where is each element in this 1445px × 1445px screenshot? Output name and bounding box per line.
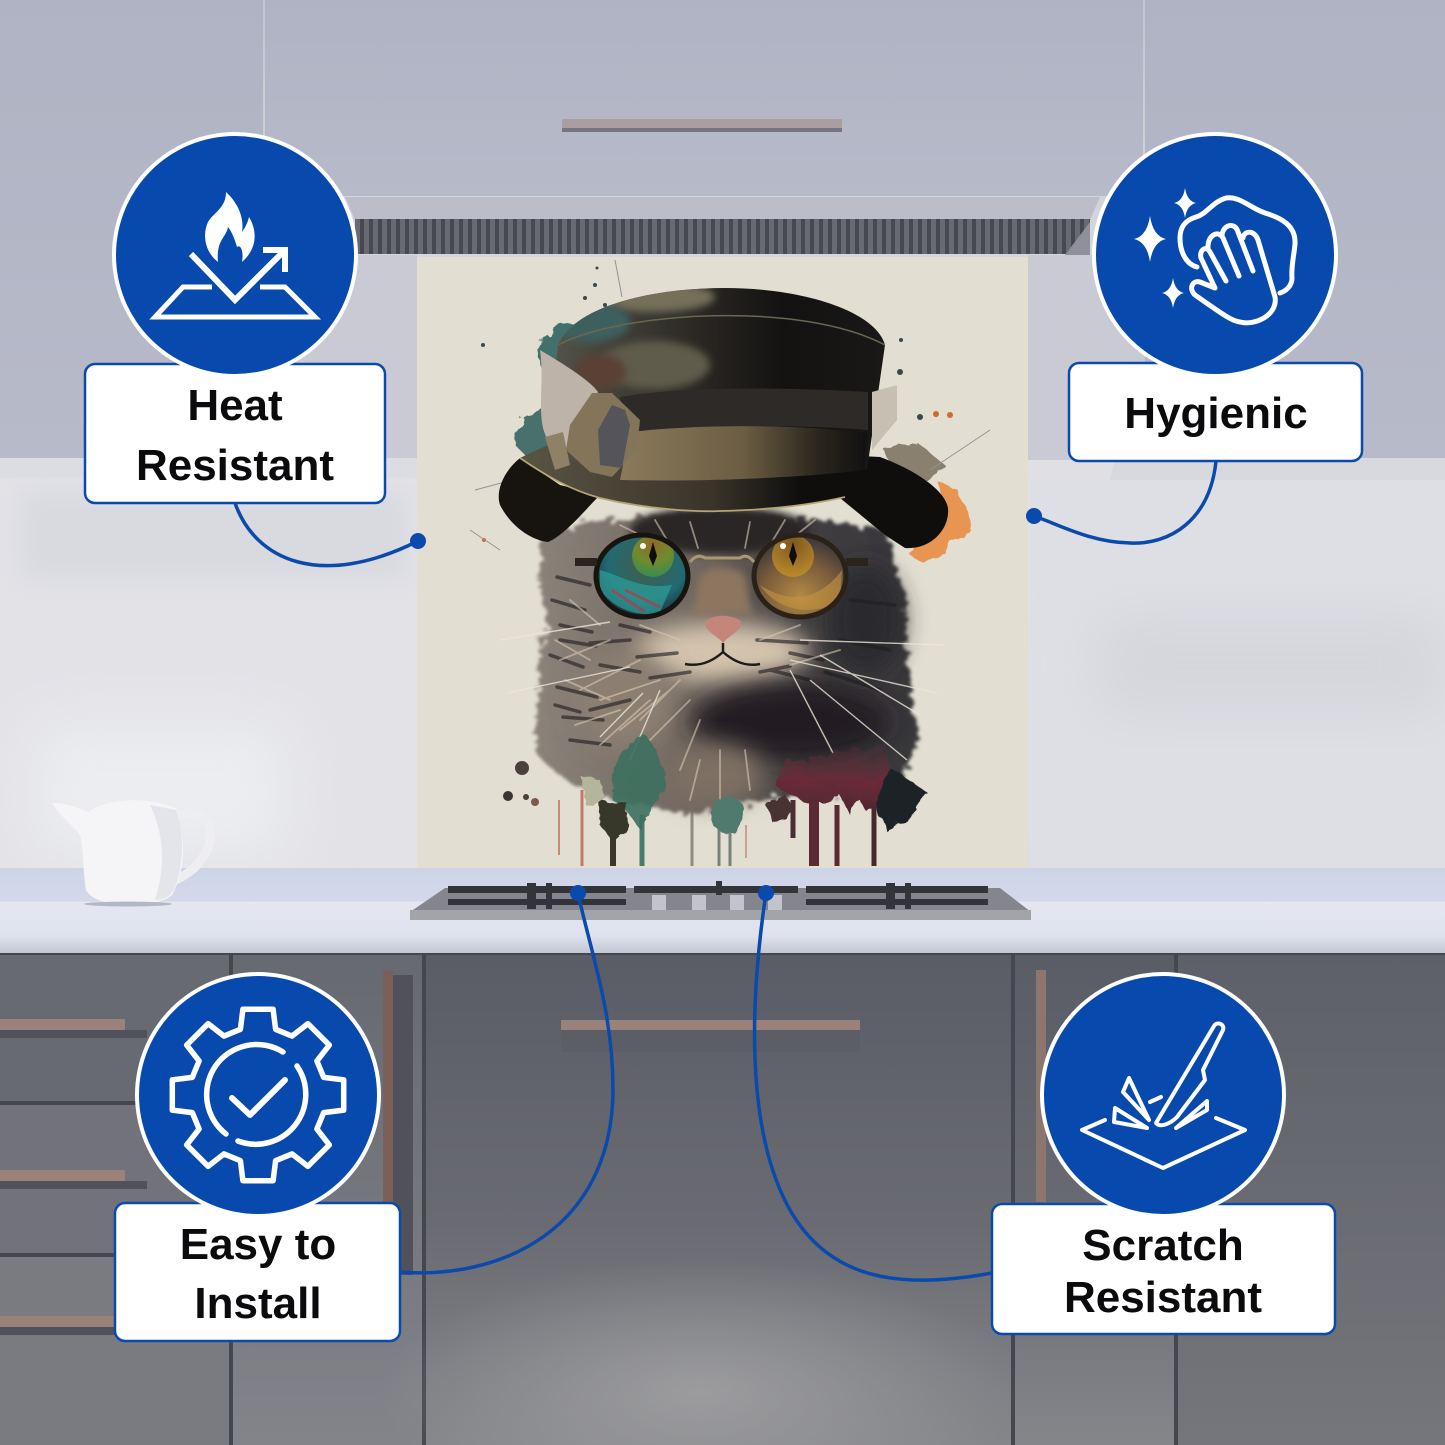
range hood — [345, 197, 1100, 255]
cat ears — [540, 350, 598, 450]
upper cabinets — [0, 0, 1445, 480]
nose bridge and nose — [685, 568, 760, 665]
badge: hygienic — [1069, 132, 1362, 461]
top hat — [499, 282, 948, 548]
label: easy to install — [115, 1203, 400, 1341]
label: scratch resistant — [992, 1204, 1335, 1334]
cat fur — [500, 506, 943, 815]
cabinet handles — [0, 970, 1046, 1335]
label: hygienic: Hygienic — [1124, 389, 1308, 438]
label: heat resistant: Resistant — [136, 441, 334, 490]
badge: heat resistant — [85, 132, 385, 503]
hat buckle — [545, 393, 640, 477]
lower cabinets — [0, 953, 1445, 1445]
hat band — [620, 388, 868, 433]
icon: flame over surface — [155, 192, 315, 317]
eyes and round glasses — [575, 535, 868, 617]
label: heat resistant — [85, 364, 385, 503]
fur stripes — [550, 577, 895, 745]
label: hygienic — [1069, 363, 1362, 461]
paint splatter — [470, 260, 990, 806]
icon: wiping hand and sparkles — [1134, 188, 1295, 323]
brim — [520, 440, 948, 548]
label: easy to install: Install — [194, 1279, 322, 1328]
cooktop — [410, 881, 1031, 920]
label: scratch resistant: Resistant — [1064, 1273, 1262, 1322]
whiskers — [500, 622, 943, 760]
connector: hygienic — [1026, 461, 1216, 543]
paint blobs over fur — [580, 736, 925, 842]
splashback panel with cat artwork — [417, 257, 1028, 868]
paint drips — [559, 790, 874, 866]
badge: easy to install — [115, 972, 400, 1341]
label: easy to install: Easy to — [180, 1220, 336, 1269]
connector: heat resistant — [235, 503, 426, 566]
connector: easy to install — [400, 885, 613, 1273]
countertop — [0, 868, 1445, 953]
crown — [548, 288, 885, 470]
badge: scratch resistant — [992, 972, 1335, 1334]
label: heat resistant: Heat — [187, 381, 283, 430]
connector: scratch resistant — [755, 885, 992, 1280]
icon: gear with check mark — [172, 1009, 344, 1181]
label: scratch resistant: Scratch — [1082, 1221, 1244, 1270]
icon: knife scratching surface — [1082, 1023, 1245, 1168]
teapot — [52, 800, 210, 906]
